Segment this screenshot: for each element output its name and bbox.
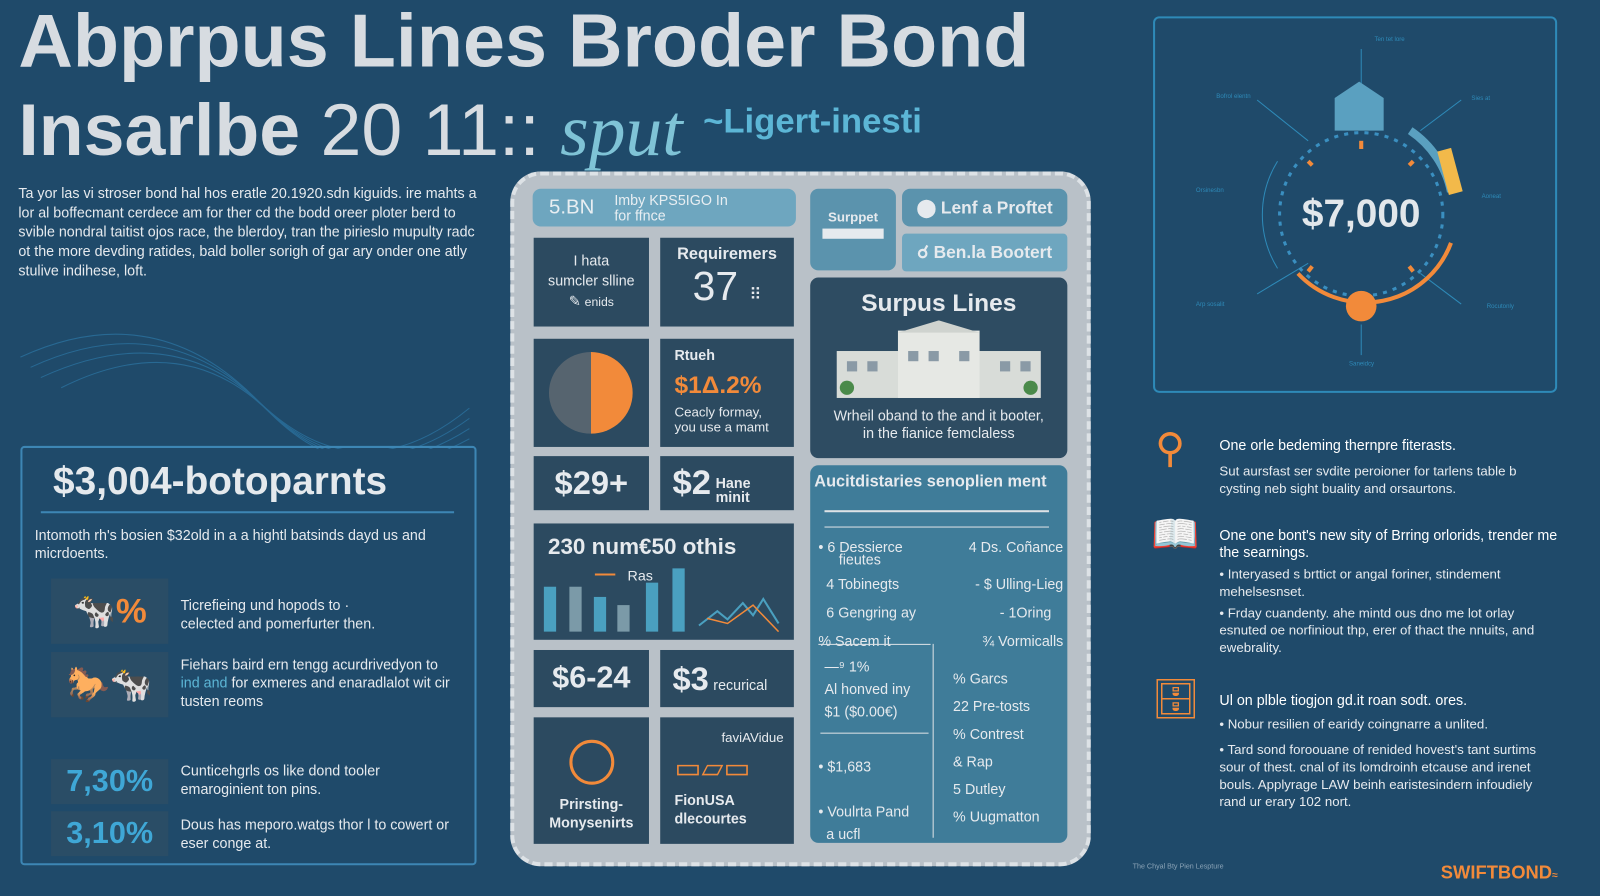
tile: $6-24: $6-24 — [552, 661, 630, 695]
stat 7.30%: 7,30% — [66, 764, 153, 798]
panel: center dashboard — [510, 171, 1091, 866]
item 2: One one bont's new sity of Brring orlorids, trender me the searnings. — [1219, 527, 1557, 560]
tile: globe icon — [534, 717, 649, 844]
footnote: The Chyal Bty Pien Lespture — [1133, 863, 1224, 870]
panel: Surpus Lines building: in the fianice femclaless — [863, 424, 1015, 441]
tile: Lenf a Profet: ⬤ Lenf a Proftet — [917, 198, 1053, 217]
tile: documents icon: dlecourtes — [674, 810, 747, 827]
item 1: ⚲ — [1155, 427, 1185, 471]
pie chart — [534, 339, 649, 447]
tile: Ben.la Bootert — [902, 234, 1067, 271]
item 2: 📖 — [1151, 513, 1199, 556]
panel: auditing list: % Garcs — [953, 670, 1008, 687]
tile: Requirements 37: Requiremers — [677, 246, 777, 263]
tile: I hata — [534, 238, 649, 327]
tile: $6-24 — [534, 650, 649, 707]
icon: orange animals 2 — [51, 652, 168, 717]
title: Abprpus Lines Broder Bond — [18, 0, 1029, 83]
panel: left stats — [20, 446, 477, 865]
panel: Surpus Lines building: Wrheil oband to the and it booter, — [834, 407, 1044, 423]
icon: orange animals 2: 🐎🐄 — [66, 665, 153, 704]
tile: $14.2%: Rtueh — [674, 347, 715, 363]
item 3 — [1151, 679, 1536, 809]
panel: auditing list: 5 Dutley — [953, 781, 1005, 797]
panel: Surpus Lines building — [810, 278, 1067, 458]
panel: $7,000 circular diagram: Arp sosalit — [1196, 301, 1225, 308]
title — [18, 0, 1029, 171]
tile: $14.2%: you use a mamt — [674, 419, 769, 435]
panel heading: $3,004-botoparnts — [53, 460, 387, 503]
panel: $7,000 circular diagram — [1153, 16, 1557, 393]
intro text: Ta yor las vi stroser bond hal hos eratle 20.1920.sdn kiguids. ire mahts a lor al boffecmant cerdece am for ther cd the bodd oreer ploter berd to svible nondral taitist ojos race, the blerdoy, tran the pirieslo mupulty radc ot the more devding ratides, bald boller sorigh of gar ary onder one atly stulive indihese, loft. — [18, 185, 477, 279]
panel: auditing list — [810, 465, 1067, 843]
tile: $2: Hane — [716, 474, 751, 491]
bar chart tile: 230 num€50 othis — [548, 534, 736, 559]
panel: auditing list: a ucfl — [826, 826, 860, 842]
panel: auditing list: 4 Tobinegts — [826, 576, 899, 592]
item 1: One orle bedeming thernpre fiterasts. — [1219, 437, 1456, 453]
tile: $3 — [660, 650, 794, 707]
panel: $7,000 circular diagram: Bofrol elentn — [1216, 93, 1251, 100]
panel: auditing list: % Sacem it — [818, 633, 891, 649]
title: Insarlbe 20 11:: sput ~Ligert-inesti — [18, 90, 922, 171]
item 2: • Frday cuandenty. ahe mintd ous dno me lot orlay esnuted oe norfiniout thp, erer of thact the nnuits, and ewebrality. — [1219, 605, 1534, 655]
tile: Lenf a Profet — [902, 189, 1067, 227]
tile: Surppet — [810, 189, 896, 270]
panel: left stats: Ticrefieing und hopods to · — [181, 597, 349, 613]
header bar: 5.BN — [549, 196, 594, 218]
item 2 — [1151, 513, 1557, 655]
icon: orange animals 1 — [51, 579, 168, 644]
panel: $7,000 circular diagram: Aoneat — [1482, 193, 1501, 200]
header bar: for ffnce — [614, 207, 666, 223]
bar chart tile: Ras — [628, 569, 653, 585]
item 1: Sut aursfast ser svdite peroioner for tarlens table b cysting neb sight buality and orsaurtons. — [1219, 463, 1517, 496]
item 2: • Interyased s brttict or angal foriner, stindement mehelsesnset. — [1219, 566, 1501, 599]
tile: $2: minit — [716, 489, 750, 505]
panel: $7,000 circular diagram: Orsinesbn — [1196, 187, 1224, 194]
panel: auditing list: & Rap — [953, 753, 993, 769]
tile: $14.2%: $1Δ.2% — [674, 371, 762, 399]
tile: $29+: $29+ — [555, 464, 628, 501]
tile: documents icon: faviAVidue — [721, 730, 784, 745]
right list — [1151, 427, 1557, 809]
panel intro: Intomoth rh's bosien $32old in a a hightl batsinds dayd us and micrdoents. — [35, 527, 426, 561]
icon: orange animals 1: 🐄% — [73, 592, 147, 631]
tile: $3: $3 recurical — [672, 660, 767, 697]
panel: auditing list: Al honved iny — [824, 681, 910, 697]
tile: Requirements 37: 37 ⠿ — [693, 264, 761, 309]
tile: documents icon — [660, 717, 794, 844]
tile: documents icon: FionUSA — [674, 792, 735, 808]
tile: $29+ — [534, 456, 649, 510]
item 1 — [1155, 427, 1517, 496]
item 3: • Nobur resilien of earidy coingnarre a unlited. — [1219, 716, 1488, 732]
tile: I hata: I hata — [573, 252, 609, 268]
panel: auditing list: 22 Pre-tosts — [953, 698, 1030, 714]
panel: Surpus Lines building: Surpus Lines — [861, 290, 1016, 317]
panel: left stats: Cunticehgrls os like dond tooler emaroginient ton pins. — [181, 762, 380, 797]
panel: $7,000 circular diagram: Sies at — [1471, 95, 1490, 102]
item 3: • Tard sond foroouane of renided hovest's tant surtims sour of thest. cnal of its lomdroinh etcause and irenet bouls. Applyrage LAW beinh earistesindern infoudiely rand ur erary 102 nort. — [1219, 742, 1536, 809]
tile: Requirements 37 — [660, 238, 794, 327]
panel: auditing list: • Voulrta Pand — [818, 803, 909, 819]
stat 3.10%: 3,10% — [66, 816, 153, 850]
header bar: Imby KPS5IGO In — [614, 192, 728, 208]
panel: auditing list: % Uugmatton — [953, 808, 1040, 824]
tile: I hata: ✎ enids — [569, 293, 614, 309]
decorative wave lines — [20, 334, 470, 449]
tile: $2: $2 — [672, 463, 711, 502]
panel: auditing list: - 1Oring — [1000, 604, 1051, 620]
panel: auditing list: % Contrest — [953, 726, 1024, 742]
item 3: Ul on plble tiogjon gd.it roan sodt. ores. — [1219, 692, 1467, 708]
panel: $7,000 circular diagram: Ten tet lore — [1374, 36, 1405, 43]
tile: $14.2%: Ceacly formay, — [674, 404, 762, 419]
panel: auditing list: • 6 Dessierce — [818, 539, 903, 555]
tile: documents icon: ▭▱▭ — [674, 752, 750, 784]
stat 3.10% — [51, 811, 168, 856]
tile: I hata: sumcler slline — [548, 272, 635, 289]
stat 7.30% — [51, 759, 168, 804]
tile: Ben.la Bootert: ☌ Ben.la Bootert — [917, 243, 1052, 262]
tile: $2 — [660, 456, 794, 510]
panel: auditing list: $1 ($0.00€) — [824, 703, 898, 719]
panel: auditing list: Aucitdistaries senoplien ment — [814, 473, 1047, 491]
panel: auditing list: - $ Ulling-Lieg — [975, 576, 1063, 592]
panel: left stats: celected and pomerfurter then. — [181, 615, 375, 632]
item 3: 🗄 — [1151, 679, 1200, 721]
panel: left stats: Dous has meporo.watgs thor l to cowert or eser conge at. — [181, 816, 449, 851]
panel: auditing list: ¾ Vormicalls — [982, 633, 1063, 649]
panel: auditing list: 6 Gengring ay — [826, 604, 916, 620]
panel: auditing list: fieutes — [839, 551, 881, 567]
panel: $7,000 circular diagram: Rocutonly — [1487, 303, 1515, 310]
panel: left stats: Fiehars baird ern tengg acurdrivedyon to ind and for exmeres and enaradlalot wit cir tusten reoms — [181, 656, 450, 709]
panel: auditing list: • $1,683 — [818, 758, 871, 774]
panel: $7,000 circular diagram: $7,000 — [1302, 193, 1421, 236]
logo: SWIFTBOND: SWIFTBOND≈ — [1441, 862, 1558, 883]
panel: auditing list: 4 Ds. Coñance — [969, 539, 1063, 555]
panel: $7,000 circular diagram: Saneidcy — [1349, 360, 1375, 367]
bar chart tile — [534, 523, 794, 640]
panel: auditing list: —⁹ 1% — [824, 658, 870, 674]
header bar — [533, 189, 796, 227]
tile: globe icon: Monysenirts — [549, 814, 633, 831]
tile: $14.2% — [660, 339, 794, 447]
tile: Surppet: Surppet — [828, 209, 878, 224]
tile: globe icon: Prirsting- — [560, 796, 623, 812]
